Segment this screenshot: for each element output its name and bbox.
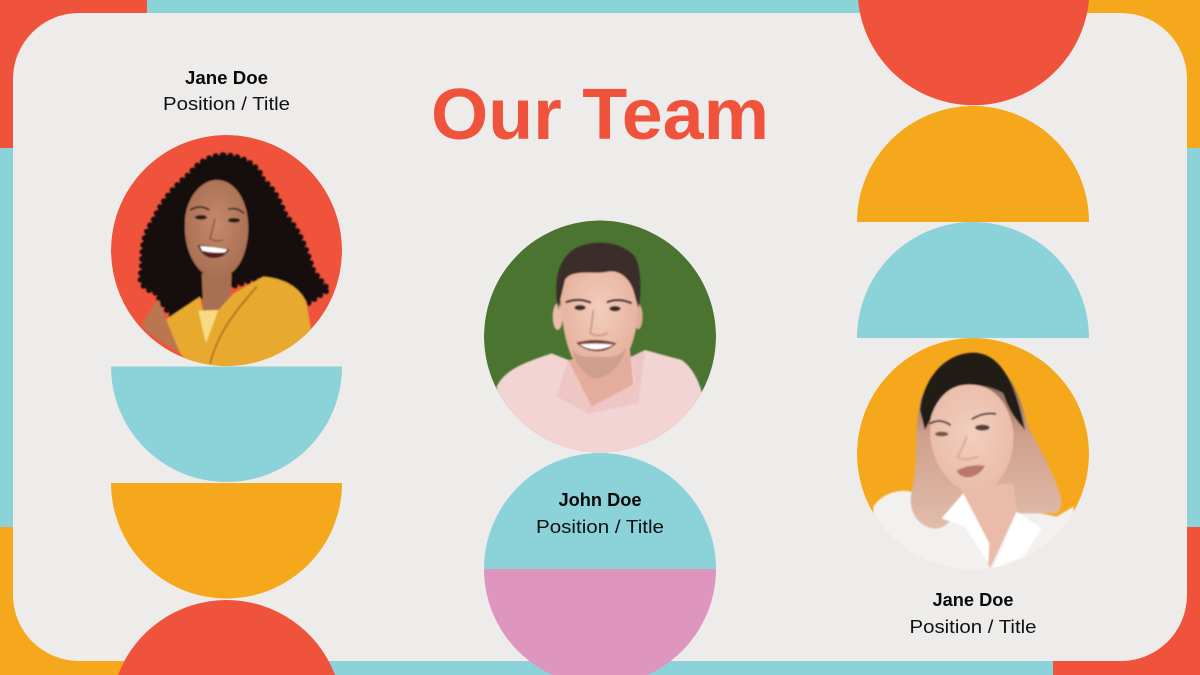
centre semicircle: pink, cropped at bottom xyxy=(484,569,716,675)
right team member caption: Jane Doe xyxy=(932,590,1014,610)
centre team member caption: Position / Title xyxy=(536,516,664,537)
centre team member caption: John Doe xyxy=(558,490,642,510)
centre semicircle: blue xyxy=(484,453,716,569)
left team member caption: Position / Title xyxy=(163,93,290,114)
left circle: red, cropped at bottom xyxy=(118,600,335,675)
right circle: red, cropped at top xyxy=(858,0,1089,105)
right team member caption xyxy=(910,590,1036,637)
right portrait: woman with ombre hair on yellow xyxy=(857,338,1089,577)
left team member caption: Jane Doe xyxy=(185,68,268,88)
title: Our Team xyxy=(431,75,769,155)
centre portrait: man on green xyxy=(484,220,716,457)
left portrait: woman with curly hair on red xyxy=(111,135,342,370)
left semicircle: blue xyxy=(111,366,342,482)
right semicircle: blue xyxy=(857,222,1089,338)
left team member caption xyxy=(163,68,290,114)
right semicircle: yellow xyxy=(857,106,1089,222)
centre team member caption xyxy=(536,490,664,537)
left semicircle: yellow xyxy=(111,483,342,598)
right team member caption: Position / Title xyxy=(910,616,1036,637)
